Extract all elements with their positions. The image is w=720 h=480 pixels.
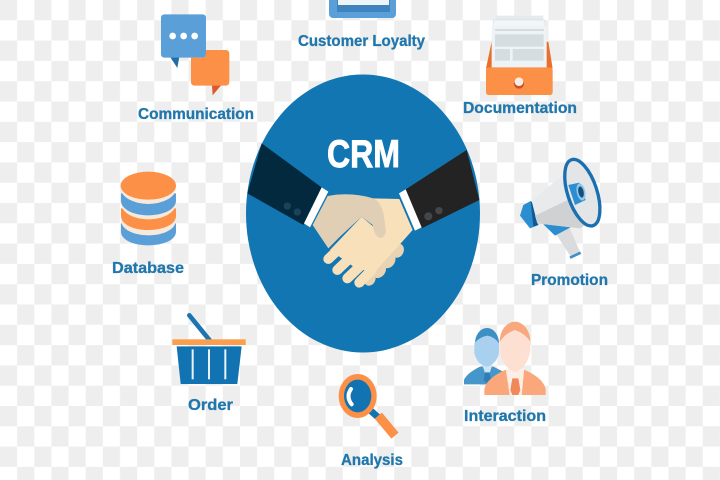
label: Database: Database	[112, 260, 184, 277]
label: Interaction: Interaction	[464, 408, 546, 425]
back hand	[313, 194, 386, 248]
label: Documentation: Documentation	[463, 100, 577, 117]
label: Order: Order	[188, 397, 233, 414]
central CRM handshake circle	[245, 74, 482, 352]
icon: documentation tray	[486, 16, 553, 95]
CRM title: CRM	[327, 133, 400, 176]
icon: interaction people	[464, 322, 546, 395]
handshake	[247, 143, 479, 288]
icon: promotion megaphone	[520, 155, 607, 258]
cuffs	[304, 187, 328, 227]
icon: database	[121, 172, 176, 245]
fingers behind	[362, 241, 406, 288]
icon: customer loyalty	[329, 0, 396, 18]
label: Promotion: Promotion	[531, 272, 608, 289]
label: Analysis: Analysis	[341, 452, 403, 469]
sleeve shadows	[245, 193, 482, 306]
icon: order basket	[172, 315, 246, 384]
icon: analysis magnifier	[339, 374, 395, 436]
label: Communication: Communication	[138, 106, 254, 123]
icon: communication speech bubbles	[161, 14, 229, 95]
right sleeve	[406, 150, 479, 228]
label: Customer Loyalty: Customer Loyalty	[298, 33, 425, 50]
front hand	[330, 198, 413, 273]
left sleeve	[247, 143, 322, 225]
